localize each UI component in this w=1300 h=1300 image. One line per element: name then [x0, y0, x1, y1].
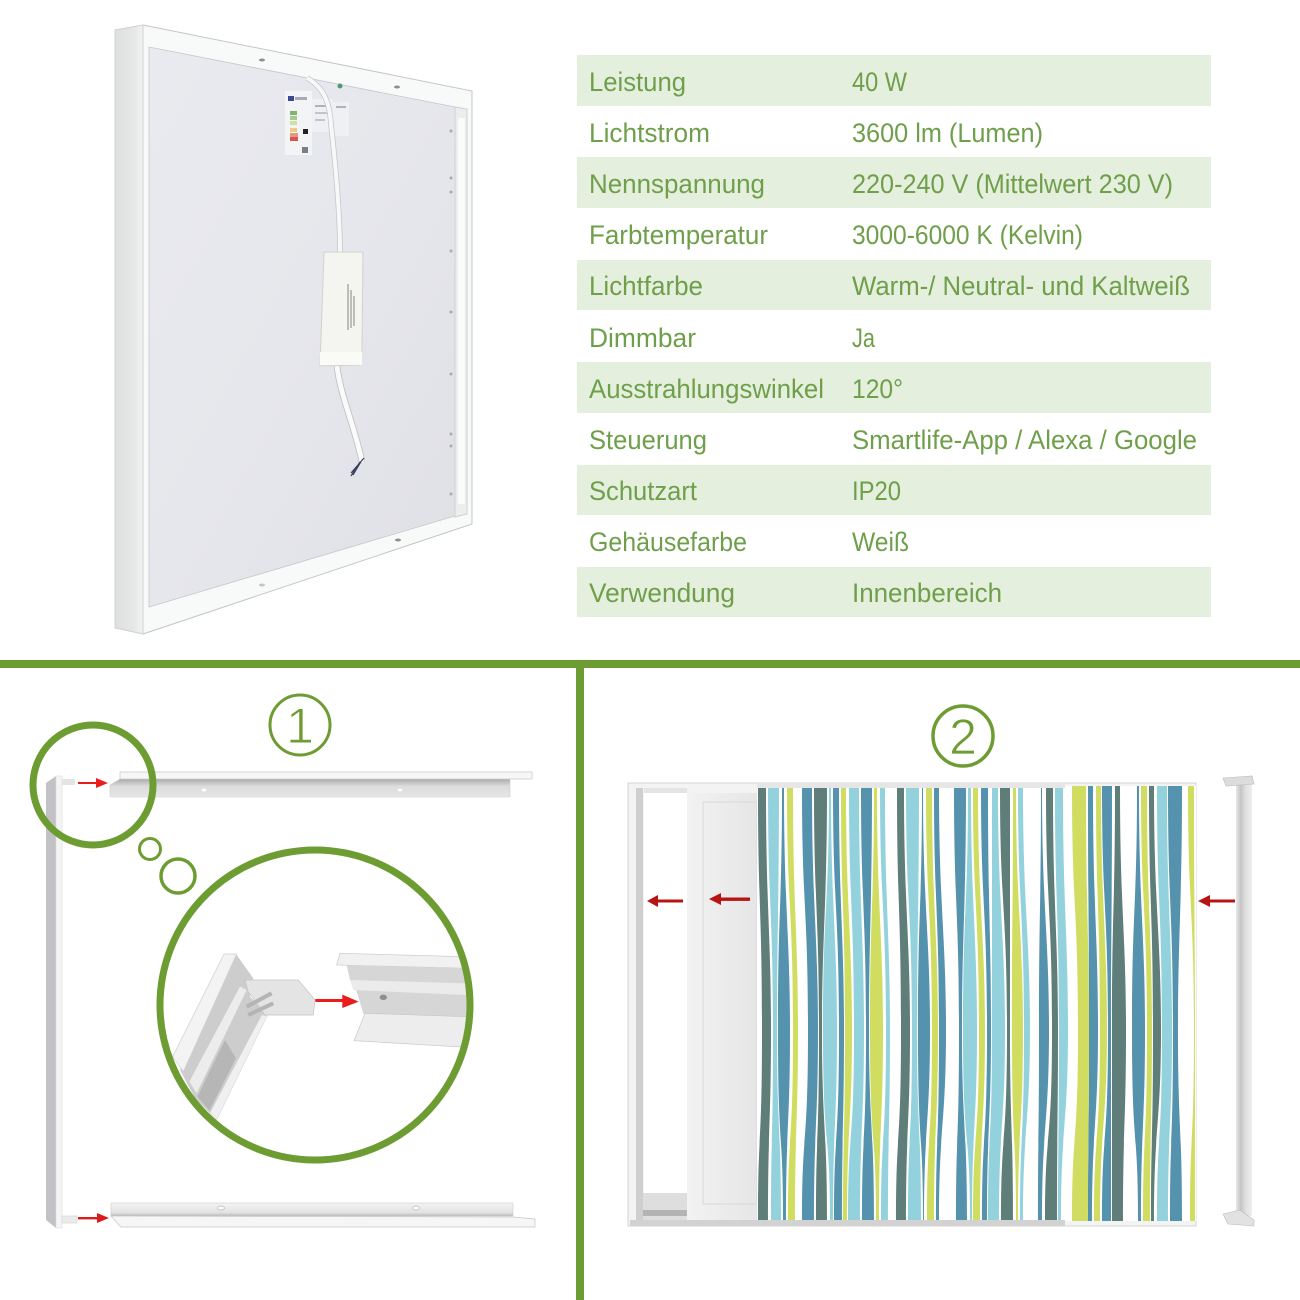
- bracket shadow patch: [197, 1040, 236, 1111]
- installation instruction label: [312, 99, 349, 136]
- row: Farbtemperatur: Farbtemperatur: [589, 220, 768, 250]
- red arrow panel: [709, 893, 750, 905]
- row: Dimmbar: Ja: [852, 323, 876, 353]
- row: Leistung: [589, 67, 907, 97]
- row: Ausstrahlungswinkel: 120°: [852, 374, 903, 404]
- row: Gehäusefarbe: [589, 527, 909, 557]
- magnified parts: [173, 953, 467, 1120]
- row: Steuerung: [589, 425, 1197, 455]
- row: Leistung: 40 W: [852, 67, 907, 97]
- decorative striped image: [757, 786, 1196, 1221]
- power cable upper: [307, 78, 340, 253]
- panel: step 2 inserting panel: [628, 706, 1254, 1226]
- row: Nennspannung: Nennspannung: [589, 169, 765, 199]
- driver box: [320, 252, 363, 366]
- red arrow magnified: [315, 995, 359, 1008]
- row: Steuerung: Steuerung: [589, 425, 707, 455]
- magnified detail circle: [160, 850, 470, 1160]
- bracket white outer strip: [173, 954, 237, 1072]
- rail section upper lip: [337, 953, 467, 968]
- blue stripes: [778, 786, 1182, 1221]
- cable wires: [351, 458, 364, 476]
- bracket rail body: [180, 954, 267, 1120]
- medium thought bubble: [161, 859, 195, 893]
- row: Farbtemperatur: 3000-6000 K (Kelvin): [852, 220, 1083, 250]
- outer mounting frame: [628, 783, 1196, 1226]
- product photo: LED panel rear view: [115, 25, 472, 634]
- row: Lichtfarbe: Warm-/ Neutral- und Kaltweiß: [852, 271, 1190, 301]
- red arrow top: [78, 778, 108, 788]
- specification table: [577, 55, 1211, 617]
- row: Lichtstrom: 3600 lm (Lumen): [852, 118, 1043, 148]
- row: Steuerung: Smartlife-App / Alexa / Google: [852, 425, 1197, 455]
- panel: step 1 frame assembly: [33, 695, 535, 1228]
- row: Lichtstrom: [589, 118, 1043, 148]
- row: Schutzart: [589, 476, 901, 506]
- green section dividers: [0, 660, 1300, 1300]
- right frame bar: [1223, 776, 1254, 1226]
- step number 2: 2: [949, 709, 977, 765]
- dark stripes: [758, 786, 1161, 1221]
- left frame rail: [46, 776, 77, 1228]
- green ground clip: [338, 84, 342, 88]
- row: Schutzart: Schutzart: [589, 476, 697, 506]
- energy label: [285, 91, 312, 155]
- row: Dimmbar: [589, 323, 876, 353]
- row: Ausstrahlungswinkel: Ausstrahlungswinkel: [589, 374, 824, 404]
- frame bottom bar: [630, 1220, 1065, 1226]
- row: Dimmbar: Dimmbar: [589, 323, 696, 353]
- magnified corner detail: [173, 953, 467, 1120]
- row: Schutzart: IP20: [852, 476, 901, 506]
- yellow stripes: [787, 786, 1195, 1221]
- right recess of frame: [455, 107, 467, 517]
- row: Verwendung: Innenbereich: [852, 578, 1002, 608]
- top frame rail: [110, 772, 532, 797]
- panel frame top and right: [143, 25, 472, 634]
- row: Nennspannung: 220-240 V (Mittelwert 230 V): [852, 169, 1173, 199]
- bracket inner ridge: [189, 987, 247, 1093]
- power cable lower: [337, 366, 362, 462]
- row: Lichtfarbe: Lichtfarbe: [589, 271, 703, 301]
- row: Gehäusefarbe: Gehäusefarbe: [589, 527, 747, 557]
- rail section body: [347, 965, 467, 1017]
- row: Lichtfarbe: [589, 271, 1190, 301]
- table row backgrounds: [577, 55, 1211, 617]
- detail circle on corner: [33, 725, 153, 845]
- step number 1: [270, 695, 330, 755]
- panel back plate: [149, 47, 455, 607]
- bottom frame rail: [111, 1203, 535, 1227]
- row: Farbtemperatur: [589, 220, 1083, 250]
- screws on right side: [450, 130, 452, 496]
- mounting holes in frame: [259, 58, 401, 586]
- step number 2: [933, 706, 993, 766]
- red arrow right bar: [1198, 895, 1235, 907]
- panel frame left side face: [115, 25, 143, 634]
- row: Verwendung: Verwendung: [589, 578, 735, 608]
- row: Leistung: Leistung: [589, 67, 686, 97]
- bracket white inner strip: [210, 1015, 267, 1120]
- step number 1: 1: [286, 698, 314, 754]
- red arrow bottom: [78, 1213, 109, 1223]
- light blue stripes: [768, 786, 1172, 1221]
- frame top bar: [757, 783, 1065, 788]
- bracket tab: [245, 980, 315, 1015]
- small thought bubble: [140, 838, 160, 860]
- row: Gehäusefarbe: Weiß: [852, 527, 909, 557]
- row: Nennspannung: [589, 169, 1173, 199]
- red arrow left frame: [647, 895, 683, 907]
- row: Lichtstrom: Lichtstrom: [589, 118, 710, 148]
- rail section lower lip: [354, 1013, 467, 1047]
- row: Verwendung: [589, 578, 1002, 608]
- LED panel sliding in: [687, 793, 757, 1220]
